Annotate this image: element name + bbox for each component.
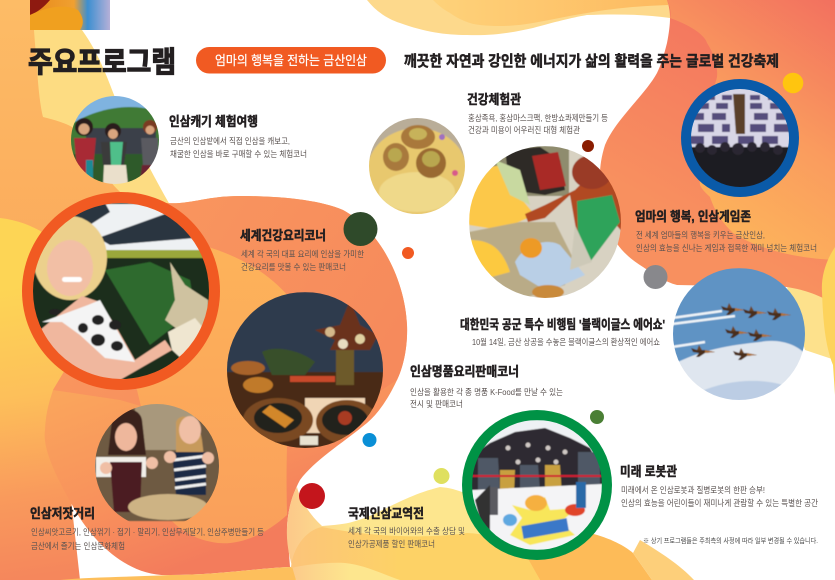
text: ginseng market street: 인삼저잣거리 — [30, 506, 95, 521]
text: health pavilion: 홍삼족욕, 홍삼마스크팩, 한방쇼콰제만들기 등 — [468, 113, 608, 123]
text: premium food corner: 전시 및 판매코너 — [410, 399, 463, 409]
text: black eagles air show: 10월 14일, 금산 상공을 수놓은 블랙이글스의 환상적인 에어쇼 — [472, 337, 660, 347]
text: ginseng picking: 채굴한 인삼을 바로 구매할 수 있는 체험코너 — [170, 149, 307, 159]
text: ginseng game zone: 엄마의 행복, 인삼게임존 — [635, 209, 751, 224]
pill: tagline: 엄마의 행복을 전하는 금산인삼 — [215, 53, 367, 68]
photo: massage experience — [469, 146, 625, 299]
text: ginseng game zone: 전 세계 엄마들의 행복을 키우는 금산인삼, — [636, 230, 765, 240]
text: ginseng game zone: 인삼의 효능을 신나는 게임과 접목한 재미 넘치는 체험코너 — [636, 243, 817, 253]
dot: dark green — [344, 212, 378, 246]
text: health pavilion — [467, 92, 608, 135]
text: premium food corner: 인삼명품요리판매코너 — [410, 364, 519, 379]
text: ginseng picking: 금산의 인삼밭에서 직접 인삼을 캐보고, — [170, 136, 290, 146]
text: ginseng picking — [169, 114, 307, 159]
photo: two girls with ginseng — [94, 393, 220, 521]
dot: grey — [644, 265, 668, 289]
text: ginseng market street — [30, 506, 264, 551]
dot: dark red — [582, 140, 594, 152]
pill: tagline — [196, 47, 386, 74]
text: world health food corner: 건강요리를 맛볼 수 있는 판매코너 — [241, 262, 346, 272]
photo: stage with blue ring — [681, 79, 799, 197]
text: international ginseng trade: 세계 각 국의 바이어와의 수출 상담 및 — [348, 526, 465, 536]
text: international ginseng trade — [348, 506, 465, 549]
text: black eagles air show — [460, 317, 665, 347]
subtitle: 깨끗한 자연과 강인한 에너지가 삶의 활력을 주는 글로벌 건강축제 — [404, 53, 779, 70]
image swatch top left — [30, 0, 110, 30]
text: international ginseng trade: 국제인삼교역전 — [348, 506, 424, 521]
title: 주요프로그램 — [28, 46, 176, 79]
text: premium food corner — [410, 364, 563, 409]
photo: robots with green ring — [462, 410, 612, 560]
text: world health food corner — [240, 228, 364, 272]
text: future robot hall: 미래 로봇관 — [620, 464, 677, 479]
photo: jets — [672, 268, 806, 402]
photo: smiling girl with orange ring — [22, 192, 220, 390]
text: health pavilion: 건강체험관 — [467, 92, 521, 107]
text: world health food corner: 세계 각 국의 대표 요리에 인삼을 가미한 — [241, 249, 364, 259]
photo: food plate — [367, 116, 467, 216]
text: future robot hall — [620, 464, 818, 508]
dot: orange — [402, 247, 414, 259]
text: health pavilion: 건강과 미용이 어우러진 대형 체험관 — [468, 125, 580, 135]
photo: ginseng picking group — [70, 95, 160, 186]
text: international ginseng trade: 인삼가공제품 할인 판매코너 — [348, 539, 435, 549]
text: ginseng picking: 인삼캐기 체험여행 — [169, 114, 258, 129]
text: world health food corner: 세계건강요리코너 — [240, 228, 326, 243]
text: ginseng game zone — [635, 209, 817, 253]
dot: yellow green — [434, 468, 450, 484]
text: premium food corner: 인삼을 활용한 각 종 명품 K-Food를 만날 수 있는 — [410, 387, 563, 397]
text: ginseng market street: 금산에서 즐기는 인삼문화체험 — [31, 541, 125, 551]
text: future robot hall: 미래에서 온 인삼로봇과 질병로봇의 한판 승부! — [621, 485, 765, 495]
dot: red — [299, 483, 325, 509]
dot: yellow — [783, 73, 803, 93]
photo: premium food table — [226, 292, 384, 452]
text: ginseng market street: 인삼씨앗고르기, 인삼꺾기 · 접기 · 말리기, 인삼무게달기, 인삼주병만들기 등 — [31, 527, 264, 537]
dot: blue — [362, 433, 376, 447]
dot: green — [590, 410, 604, 424]
text: black eagles air show: 대한민국 공군 특수 비행팀 '블랙이글스 에어쇼' — [460, 317, 665, 332]
